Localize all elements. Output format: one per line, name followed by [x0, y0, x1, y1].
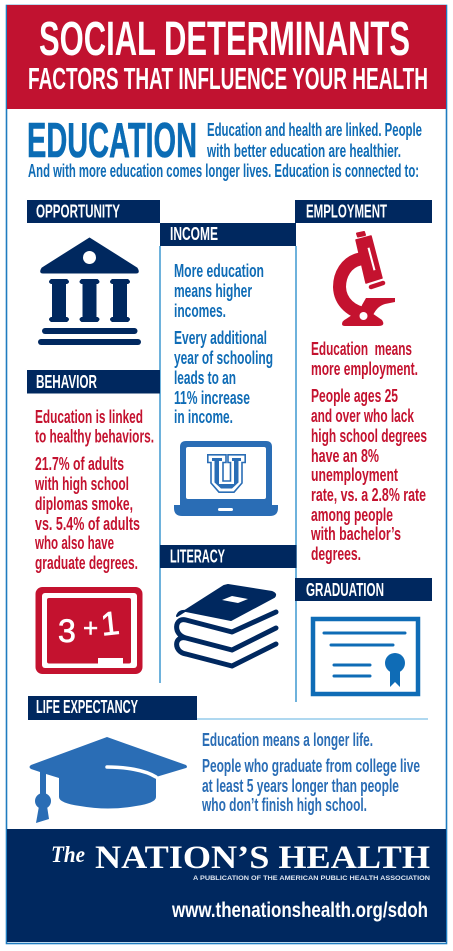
- icon: diploma: [313, 619, 418, 694]
- income text: leads to an: [174, 368, 236, 388]
- income text: More education: [174, 261, 264, 281]
- icon: bank building: [38, 238, 141, 345]
- income text: means higher: [174, 281, 252, 301]
- life expectancy text: who don’t finish high school.: [201, 795, 367, 815]
- income text: [174, 261, 273, 427]
- behavior text: Education is linked: [35, 407, 143, 427]
- icon: chalkboard: [36, 587, 142, 674]
- employment text: [310, 339, 427, 564]
- heading: behavior: BEHAVIOR: [36, 371, 97, 392]
- icon: chalkboard: 3: [58, 613, 76, 649]
- panel: income: [160, 223, 296, 516]
- panel: behavior: [27, 370, 160, 674]
- behavior text: [34, 407, 154, 573]
- life expectancy text: [201, 730, 420, 815]
- income text: year of schooling: [174, 348, 273, 368]
- masthead logo: The: [51, 842, 85, 867]
- employment text: unemployment: [311, 465, 398, 485]
- panel: literacy: [160, 545, 296, 666]
- behavior text: who also have: [34, 533, 114, 553]
- icon: stack of books: [177, 585, 276, 666]
- heading: behavior: [27, 370, 160, 394]
- panel: opportunity: [27, 200, 160, 345]
- footer: [7, 829, 446, 942]
- title banner: [7, 5, 446, 109]
- heading: income: [160, 223, 296, 246]
- behavior text: vs. 5.4% of adults: [35, 514, 140, 534]
- masthead logo: [51, 840, 430, 882]
- panel: graduation: [295, 578, 432, 694]
- employment text: degrees.: [311, 544, 361, 564]
- icon: chalkboard: +: [83, 613, 98, 643]
- income text: Every additional: [174, 328, 267, 348]
- heading: opportunity: OPPORTUNITY: [36, 200, 120, 222]
- masthead logo: NATION’S HEALTH: [95, 840, 430, 876]
- panel: employment: [295, 200, 432, 564]
- employment text: People ages 25: [311, 386, 398, 406]
- icon: laptop with letter U: [174, 441, 278, 516]
- heading: education: EDUCATION: [27, 114, 197, 168]
- icon: chalkboard: 1: [99, 604, 121, 643]
- employment text: have an 8%: [311, 446, 379, 466]
- heading: employment: EMPLOYMENT: [306, 200, 387, 222]
- behavior text: graduate degrees.: [35, 553, 138, 573]
- heading: income: INCOME: [170, 223, 218, 244]
- panel: life expectancy: [28, 696, 420, 823]
- icon: microscope: [340, 232, 395, 326]
- employment text: with bachelor’s: [310, 524, 401, 544]
- employment text: among people: [311, 505, 393, 525]
- behavior text: diplomas smoke,: [35, 494, 133, 514]
- icon: graduation cap: [30, 737, 187, 823]
- heading: literacy: LITERACY: [170, 546, 225, 566]
- heading: life expectancy: LIFE EXPECTANCY: [36, 696, 138, 717]
- behavior text: 21.7% of adults: [35, 454, 124, 474]
- behavior text: with high school: [34, 474, 129, 494]
- income text: incomes.: [174, 301, 226, 321]
- heading: graduation: GRADUATION: [306, 579, 384, 600]
- intro text: [28, 120, 422, 181]
- masthead logo: A PUBLICATION OF THE AMERICAN PUBLIC HEALTH ASSOCIATION: [193, 876, 430, 882]
- behavior text: to healthy behaviors.: [35, 426, 154, 446]
- income text: 11% increase: [174, 388, 250, 408]
- income text: in income.: [174, 407, 233, 427]
